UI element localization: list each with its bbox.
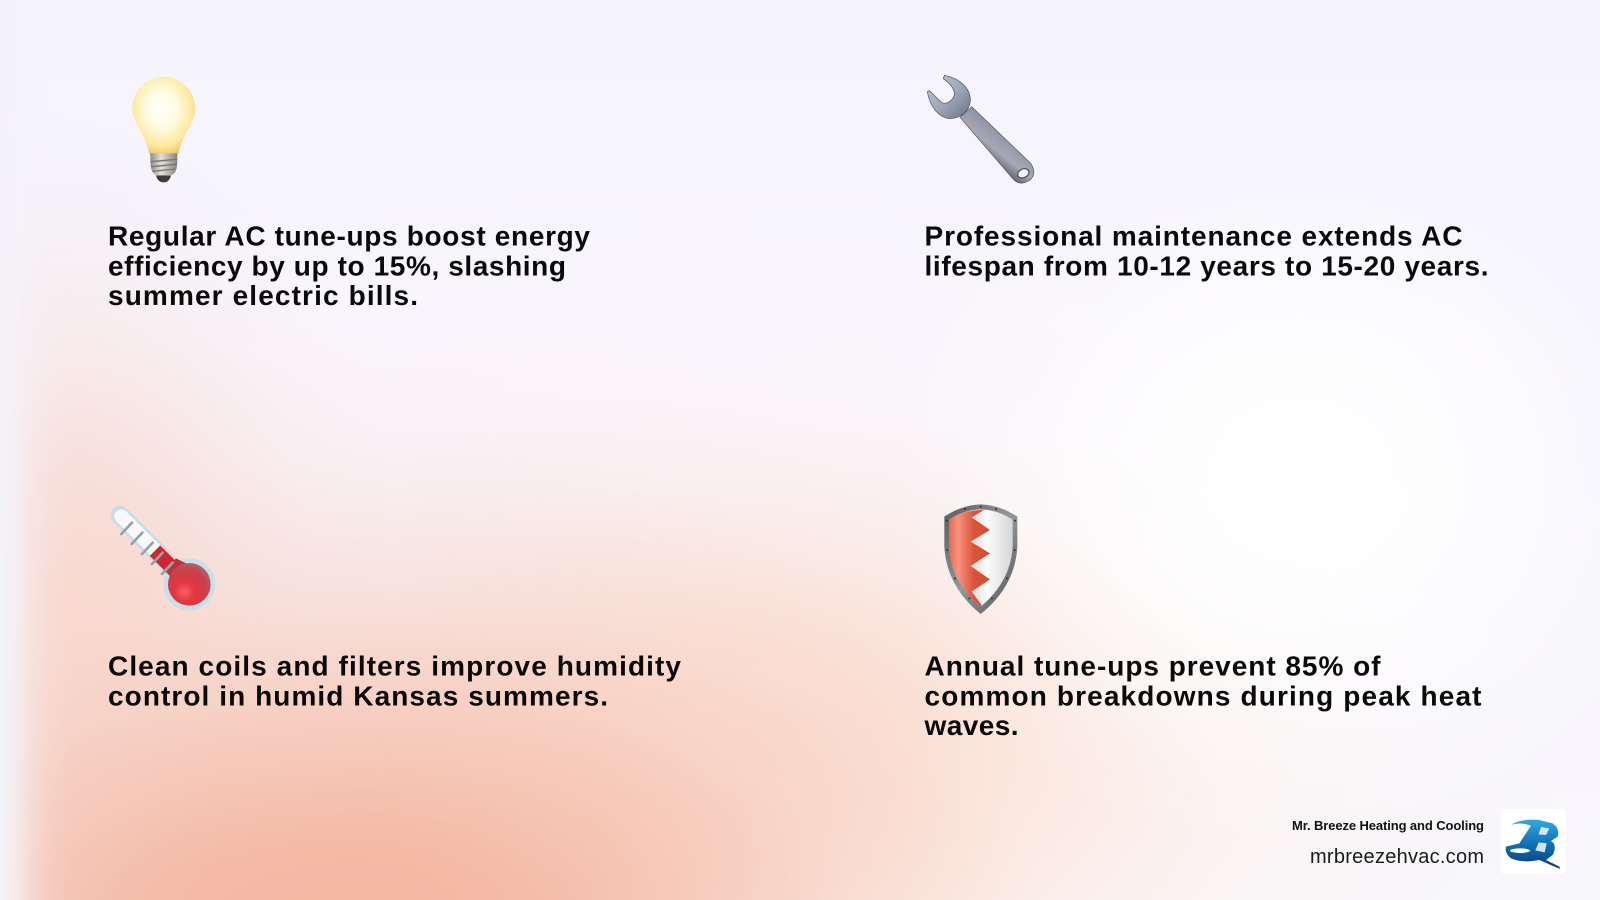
text: energy efficiency tip: efficiency by up to 15%, slashing: [108, 250, 566, 282]
footer: company name: Mr. Breeze Heating and Cooling: [1292, 818, 1484, 833]
icon: shield: [944, 504, 1017, 614]
text: breakdown prevention tip: common breakdowns during peak heat: [924, 680, 1482, 712]
footer: website: mrbreezehvac.com: [1310, 846, 1484, 868]
text: energy efficiency tip: Regular AC tune-ups boost energy: [108, 220, 590, 252]
icon: light bulb: [132, 77, 195, 182]
text: breakdown prevention tip: Annual tune-ups prevent 85% of: [924, 650, 1381, 682]
icon: wrench: [927, 75, 1034, 183]
text: humidity tip: Clean coils and filters improve humidity: [108, 650, 681, 682]
text: lifespan tip: lifespan from 10-12 years to 15-20 years.: [924, 250, 1488, 282]
text: energy efficiency tip: summer electric bills.: [108, 280, 418, 311]
logo: [1501, 809, 1566, 874]
text: breakdown prevention tip: waves.: [924, 710, 1018, 741]
text: lifespan tip: Professional maintenance extends AC: [924, 220, 1462, 252]
icon: thermometer: [120, 515, 215, 610]
text: humidity tip: control in humid Kansas summers.: [108, 680, 608, 712]
